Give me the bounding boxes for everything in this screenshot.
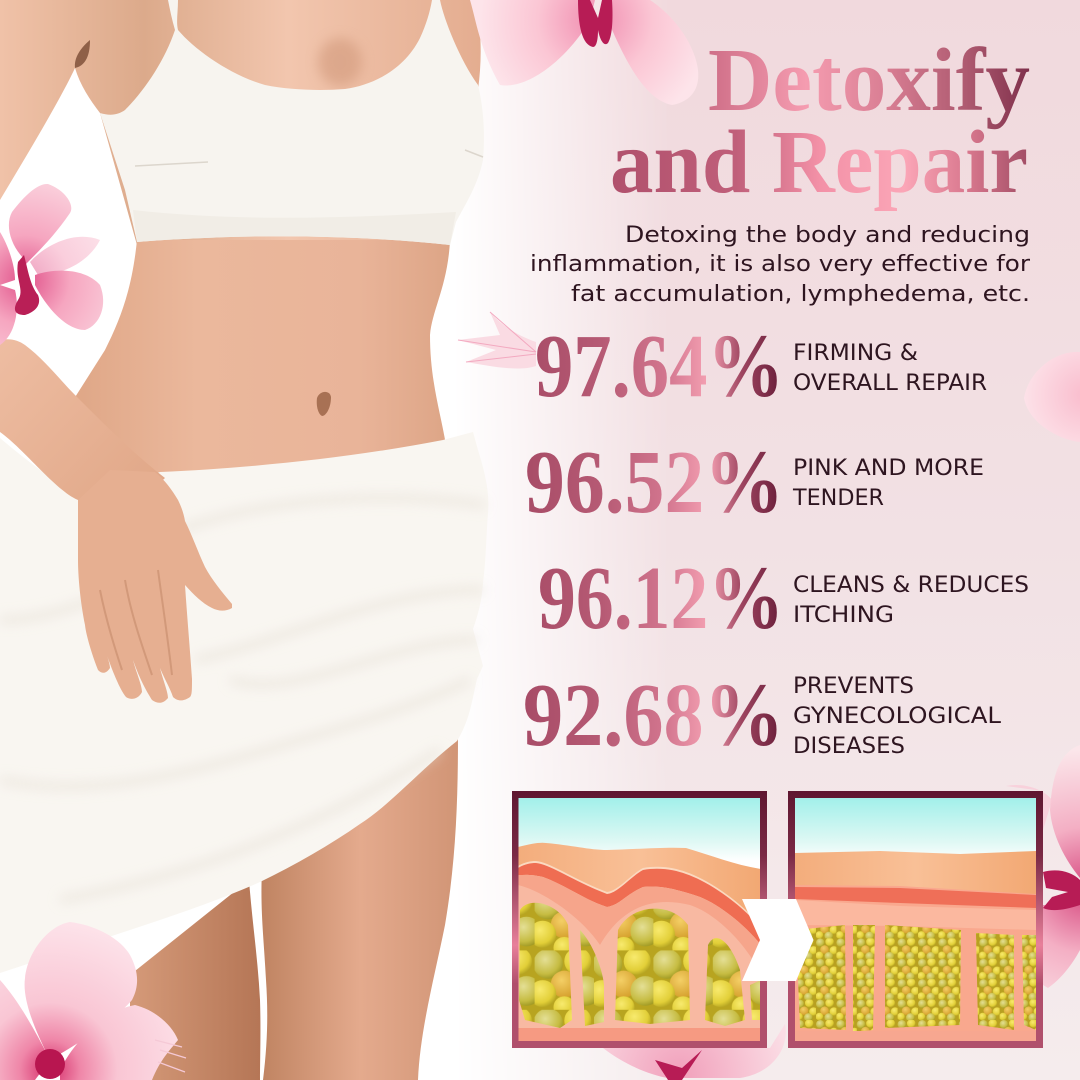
flower: bottom center	[603, 1024, 786, 1080]
stat: firming and overall repair: FIRMING &	[793, 341, 918, 366]
stat: pink and more tender	[525, 433, 984, 532]
skirt	[0, 432, 488, 973]
arrow: before to after chevron	[742, 899, 814, 981]
petal: feather near first stat	[458, 312, 536, 369]
top	[100, 0, 484, 245]
chest and upper arm	[0, 0, 481, 245]
armpit shadow	[75, 40, 90, 68]
title: and Repair	[610, 113, 1028, 212]
stat: cleans and reduces itching: CLEANS & REDUCES	[793, 573, 1029, 598]
stat: firming and overall repair: 97.64%	[535, 317, 784, 416]
description: fat accumulation, lymphedema, etc.	[571, 282, 1030, 307]
title: Detoxify	[708, 31, 1030, 130]
hand	[78, 470, 232, 703]
stat: cleans and reduces itching: 96.12%	[538, 549, 784, 648]
petal: right	[1024, 352, 1080, 442]
forearm	[0, 339, 165, 520]
panel: after, skin cross-section with small fat cells	[788, 791, 1043, 1048]
flower: top center	[470, 0, 698, 105]
stat: pink and more tender: 96.52%	[525, 433, 784, 532]
panel: before, skin cross-section with large fat cells	[512, 791, 767, 1048]
stat: pink and more tender: TENDER	[792, 486, 884, 511]
stat: prevents gynecological diseases	[523, 666, 1002, 765]
flower: bottom left	[0, 922, 186, 1080]
skirt folds	[0, 498, 485, 900]
stat: prevents gynecological diseases: 92.68%	[523, 666, 784, 765]
cleavage shading	[318, 38, 362, 86]
description	[530, 223, 1031, 307]
stat: prevents gynecological diseases: GYNECOLOGICAL	[793, 704, 1002, 729]
stat: cleans and reduces itching	[538, 549, 1029, 648]
stat: prevents gynecological diseases: PREVENTS	[793, 674, 914, 699]
background	[503, 0, 1080, 1080]
stat: cleans and reduces itching: ITCHING	[793, 603, 894, 628]
stat: firming and overall repair: OVERALL REPAIR	[793, 371, 987, 396]
navel	[317, 392, 331, 416]
legs	[130, 735, 458, 1080]
description: inflammation, it is also very effective for	[530, 252, 1031, 277]
stat: prevents gynecological diseases: DISEASES	[793, 734, 905, 759]
stat: firming and overall repair	[535, 317, 987, 416]
flower: right bottom	[1006, 745, 1080, 988]
description: Detoxing the body and reducing	[625, 223, 1030, 248]
waist	[72, 240, 450, 478]
title	[610, 31, 1030, 212]
model photo: body with top and wrap skirt	[0, 0, 488, 1080]
stat: pink and more tender: PINK AND MORE	[793, 456, 984, 481]
flower: left	[0, 184, 103, 345]
